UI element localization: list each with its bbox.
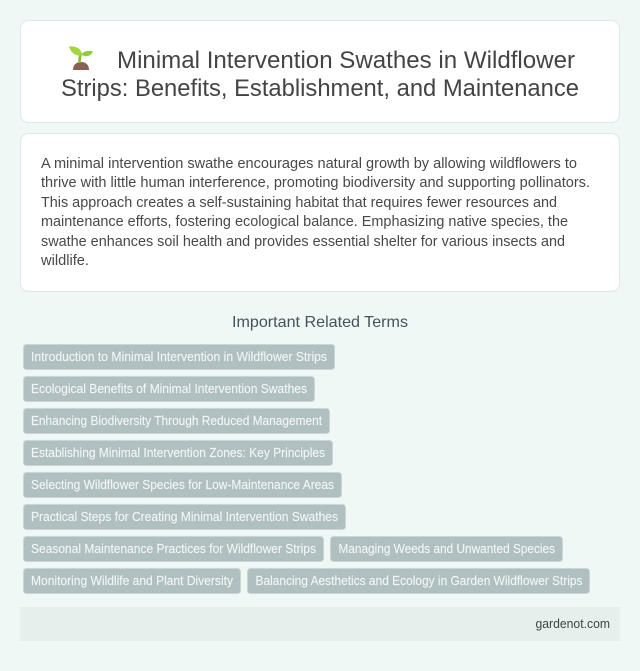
panel: title card bbox=[20, 20, 620, 122]
tag: establishing zones: Establishing Minimal Intervention Zones: Key Principles bbox=[31, 446, 325, 460]
tag: introduction: Introduction to Minimal Intervention in Wildflower Strips bbox=[31, 350, 327, 364]
footer: site name: gardenot.com bbox=[536, 616, 610, 631]
text block: description: This approach creates a self-sustaining habitat that requires fewer resources and bbox=[41, 194, 557, 211]
tag: monitoring wildlife bbox=[24, 568, 240, 594]
tag: enhancing biodiversity: Enhancing Biodiversity Through Reduced Management bbox=[31, 414, 322, 428]
heading: important related terms: Important Related Terms bbox=[232, 314, 408, 331]
tag: managing weeds bbox=[330, 536, 562, 562]
footer bar bbox=[20, 607, 620, 641]
tag: selecting species: Selecting Wildflower Species for Low-Maintenance Areas bbox=[31, 478, 334, 492]
tag: practical steps bbox=[24, 504, 346, 530]
tag: enhancing biodiversity bbox=[24, 408, 330, 434]
tag: introduction bbox=[24, 344, 334, 370]
icon: seedling bbox=[69, 46, 93, 70]
tag: practical steps: Practical Steps for Creating Minimal Intervention Swathes bbox=[31, 510, 338, 524]
tag: seasonal maintenance: Seasonal Maintenance Practices for Wildflower Strips bbox=[31, 542, 316, 556]
tag: establishing zones bbox=[24, 440, 332, 466]
tag: balancing aesthetics bbox=[248, 568, 590, 594]
tag: ecological benefits bbox=[24, 376, 314, 402]
tag: monitoring wildlife: Monitoring Wildlife and Plant Diversity bbox=[31, 574, 234, 588]
text block: description: swathe enhances soil health and provides essential shelter for various insects and bbox=[41, 233, 565, 250]
tag: selecting species bbox=[24, 472, 342, 498]
text block: description bbox=[40, 155, 590, 269]
text block: description: maintenance efforts, fostering ecological balance. Emphasizing native species, the bbox=[41, 213, 568, 230]
tag: balancing aesthetics: Balancing Aesthetics and Ecology in Garden Wildflower Strips bbox=[256, 574, 582, 588]
panel: description card bbox=[20, 134, 620, 292]
text block: description: wildlife. bbox=[40, 252, 89, 269]
tag: managing weeds: Managing Weeds and Unwanted Species bbox=[338, 542, 555, 556]
tag: seasonal maintenance bbox=[24, 536, 324, 562]
title: Strips: Benefits, Establishment, and Maintenance bbox=[61, 75, 579, 102]
panel: related term tags bbox=[24, 344, 590, 594]
title bbox=[61, 47, 579, 102]
title: Minimal Intervention Swathes in Wildflower bbox=[117, 47, 575, 74]
tag: ecological benefits: Ecological Benefits of Minimal Intervention Swathes bbox=[31, 382, 307, 396]
text block: description: A minimal intervention swathe encourages natural growth by allowing wildflowers to bbox=[41, 155, 577, 172]
text block: description: thrive with little human interference, promoting biodiversity and supporting pollinators. bbox=[41, 174, 590, 191]
